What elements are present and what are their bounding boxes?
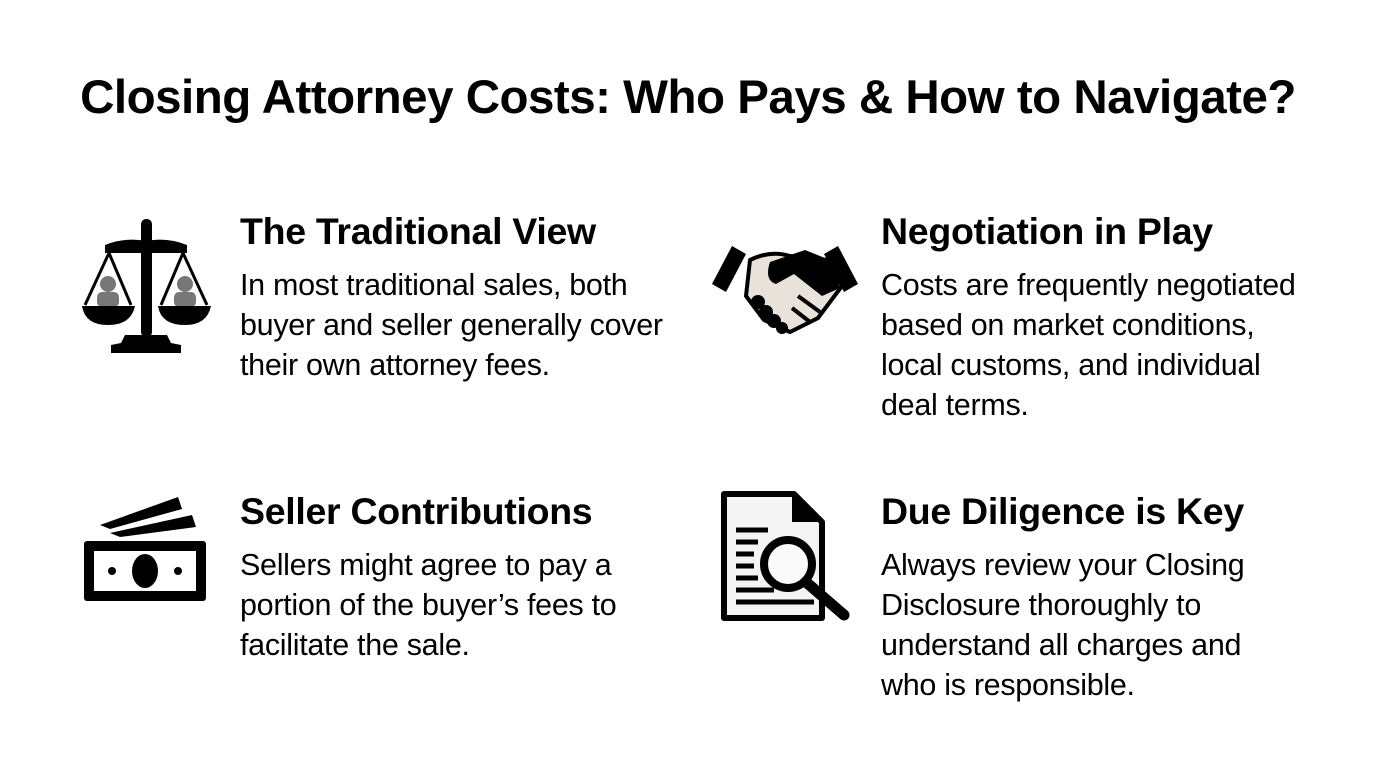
body text: local customs, and individual	[881, 348, 1261, 382]
heading: Seller Contributions	[240, 490, 592, 532]
panel: negotiation	[712, 210, 1296, 422]
body text: understand all charges and	[881, 628, 1241, 662]
body text: who is responsible.	[881, 668, 1135, 702]
body text: Disclosure thoroughly to	[881, 588, 1201, 622]
body text: buyer and seller generally cover	[240, 308, 663, 342]
icon: handshake	[712, 246, 858, 334]
panel: traditional view	[82, 210, 663, 382]
icon: money	[84, 497, 206, 601]
panel: due diligence	[721, 490, 1244, 702]
body text: based on market conditions,	[881, 308, 1254, 342]
body text: Costs are frequently negotiated	[881, 268, 1296, 302]
body text: their own attorney fees.	[240, 348, 550, 382]
body text	[881, 548, 1244, 702]
title: Closing Attorney Costs: Who Pays & How to Navigate?	[80, 71, 1296, 124]
body text	[881, 268, 1296, 422]
body text: deal terms.	[881, 388, 1029, 422]
body text	[240, 268, 663, 382]
icon: document magnifier	[721, 491, 850, 621]
heading: Due Diligence is Key	[881, 490, 1244, 532]
panel: seller contributions	[84, 490, 616, 662]
body text: In most traditional sales, both	[240, 268, 627, 302]
heading: Negotiation in Play	[881, 210, 1213, 252]
body text: portion of the buyer’s fees to	[240, 588, 616, 622]
body text: Always review your Closing	[881, 548, 1244, 582]
body text: Sellers might agree to pay a	[240, 548, 611, 582]
body text	[240, 548, 616, 662]
icon: scales	[82, 219, 211, 353]
body text: facilitate the sale.	[240, 628, 470, 662]
heading: The Traditional View	[240, 210, 596, 252]
